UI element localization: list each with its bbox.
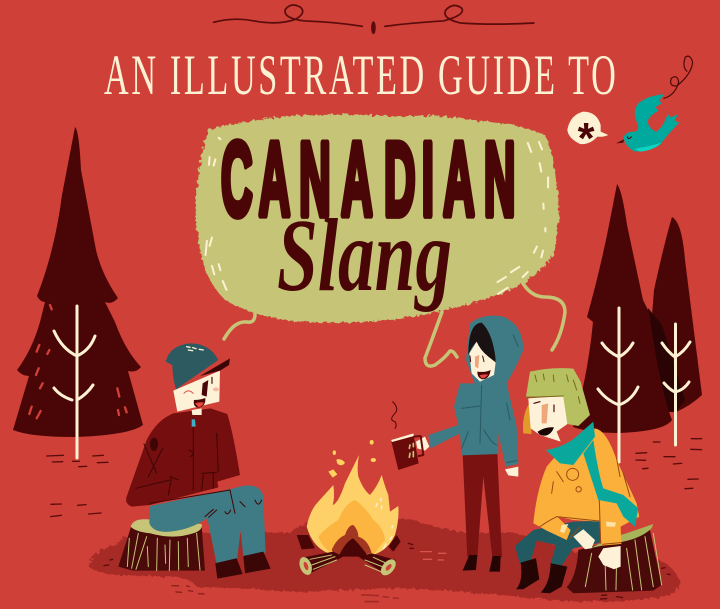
right back pine tree — [648, 217, 702, 412]
man in red jacket on stump — [118, 343, 271, 579]
woman in blue hoodie with mug — [391, 316, 523, 572]
right white saplings — [598, 308, 690, 462]
woman shoes — [463, 555, 501, 572]
ground shadow — [88, 519, 681, 602]
title line: AN ILLUSTRATED GUIDE TO — [104, 44, 616, 107]
icon: bird with speech bubble — [567, 56, 693, 163]
bird body — [616, 56, 693, 152]
campfire — [297, 440, 401, 578]
bubble tail: left speaker — [224, 305, 255, 339]
heading: Canadian: CANADIAN — [221, 121, 515, 237]
top flourish — [214, 5, 534, 34]
flames outer — [307, 455, 399, 555]
stump left — [118, 519, 205, 571]
seated man head and hat — [523, 368, 590, 442]
stump right — [567, 524, 662, 593]
flames base — [338, 538, 368, 557]
seated man in orange sweater — [515, 368, 662, 593]
front logs — [297, 552, 399, 578]
bubble tail: right speaker — [521, 280, 565, 350]
man left jacket — [126, 408, 262, 517]
mug with steam — [391, 402, 423, 470]
seated man sweater — [533, 428, 639, 546]
heading: Slang: Slang — [277, 198, 452, 313]
man left trousers — [149, 486, 266, 564]
woman face — [468, 323, 496, 382]
man left head — [166, 343, 230, 415]
woman hands — [416, 437, 518, 477]
seated man trousers — [515, 520, 620, 568]
seated man scarf — [546, 422, 638, 527]
left pine tree — [13, 127, 143, 437]
flames ember — [332, 525, 372, 558]
woman trousers — [463, 453, 502, 557]
flame highlights — [376, 498, 393, 549]
flames inner — [318, 500, 385, 555]
ground dashes right — [362, 439, 702, 602]
rear logs — [297, 535, 401, 552]
woman hoodie — [428, 316, 523, 467]
seated man boots — [516, 558, 567, 593]
speech bubble — [196, 114, 565, 366]
bubble tail: middle speaker — [425, 312, 457, 366]
bird speech bubble: * — [578, 115, 595, 163]
bubble stitches — [206, 138, 548, 294]
sparks — [328, 440, 376, 478]
left white sapling — [54, 306, 95, 458]
seated man hands — [573, 529, 621, 569]
right front pine tree — [573, 184, 672, 433]
man left boots — [215, 552, 271, 579]
ground dashes left — [47, 455, 204, 594]
